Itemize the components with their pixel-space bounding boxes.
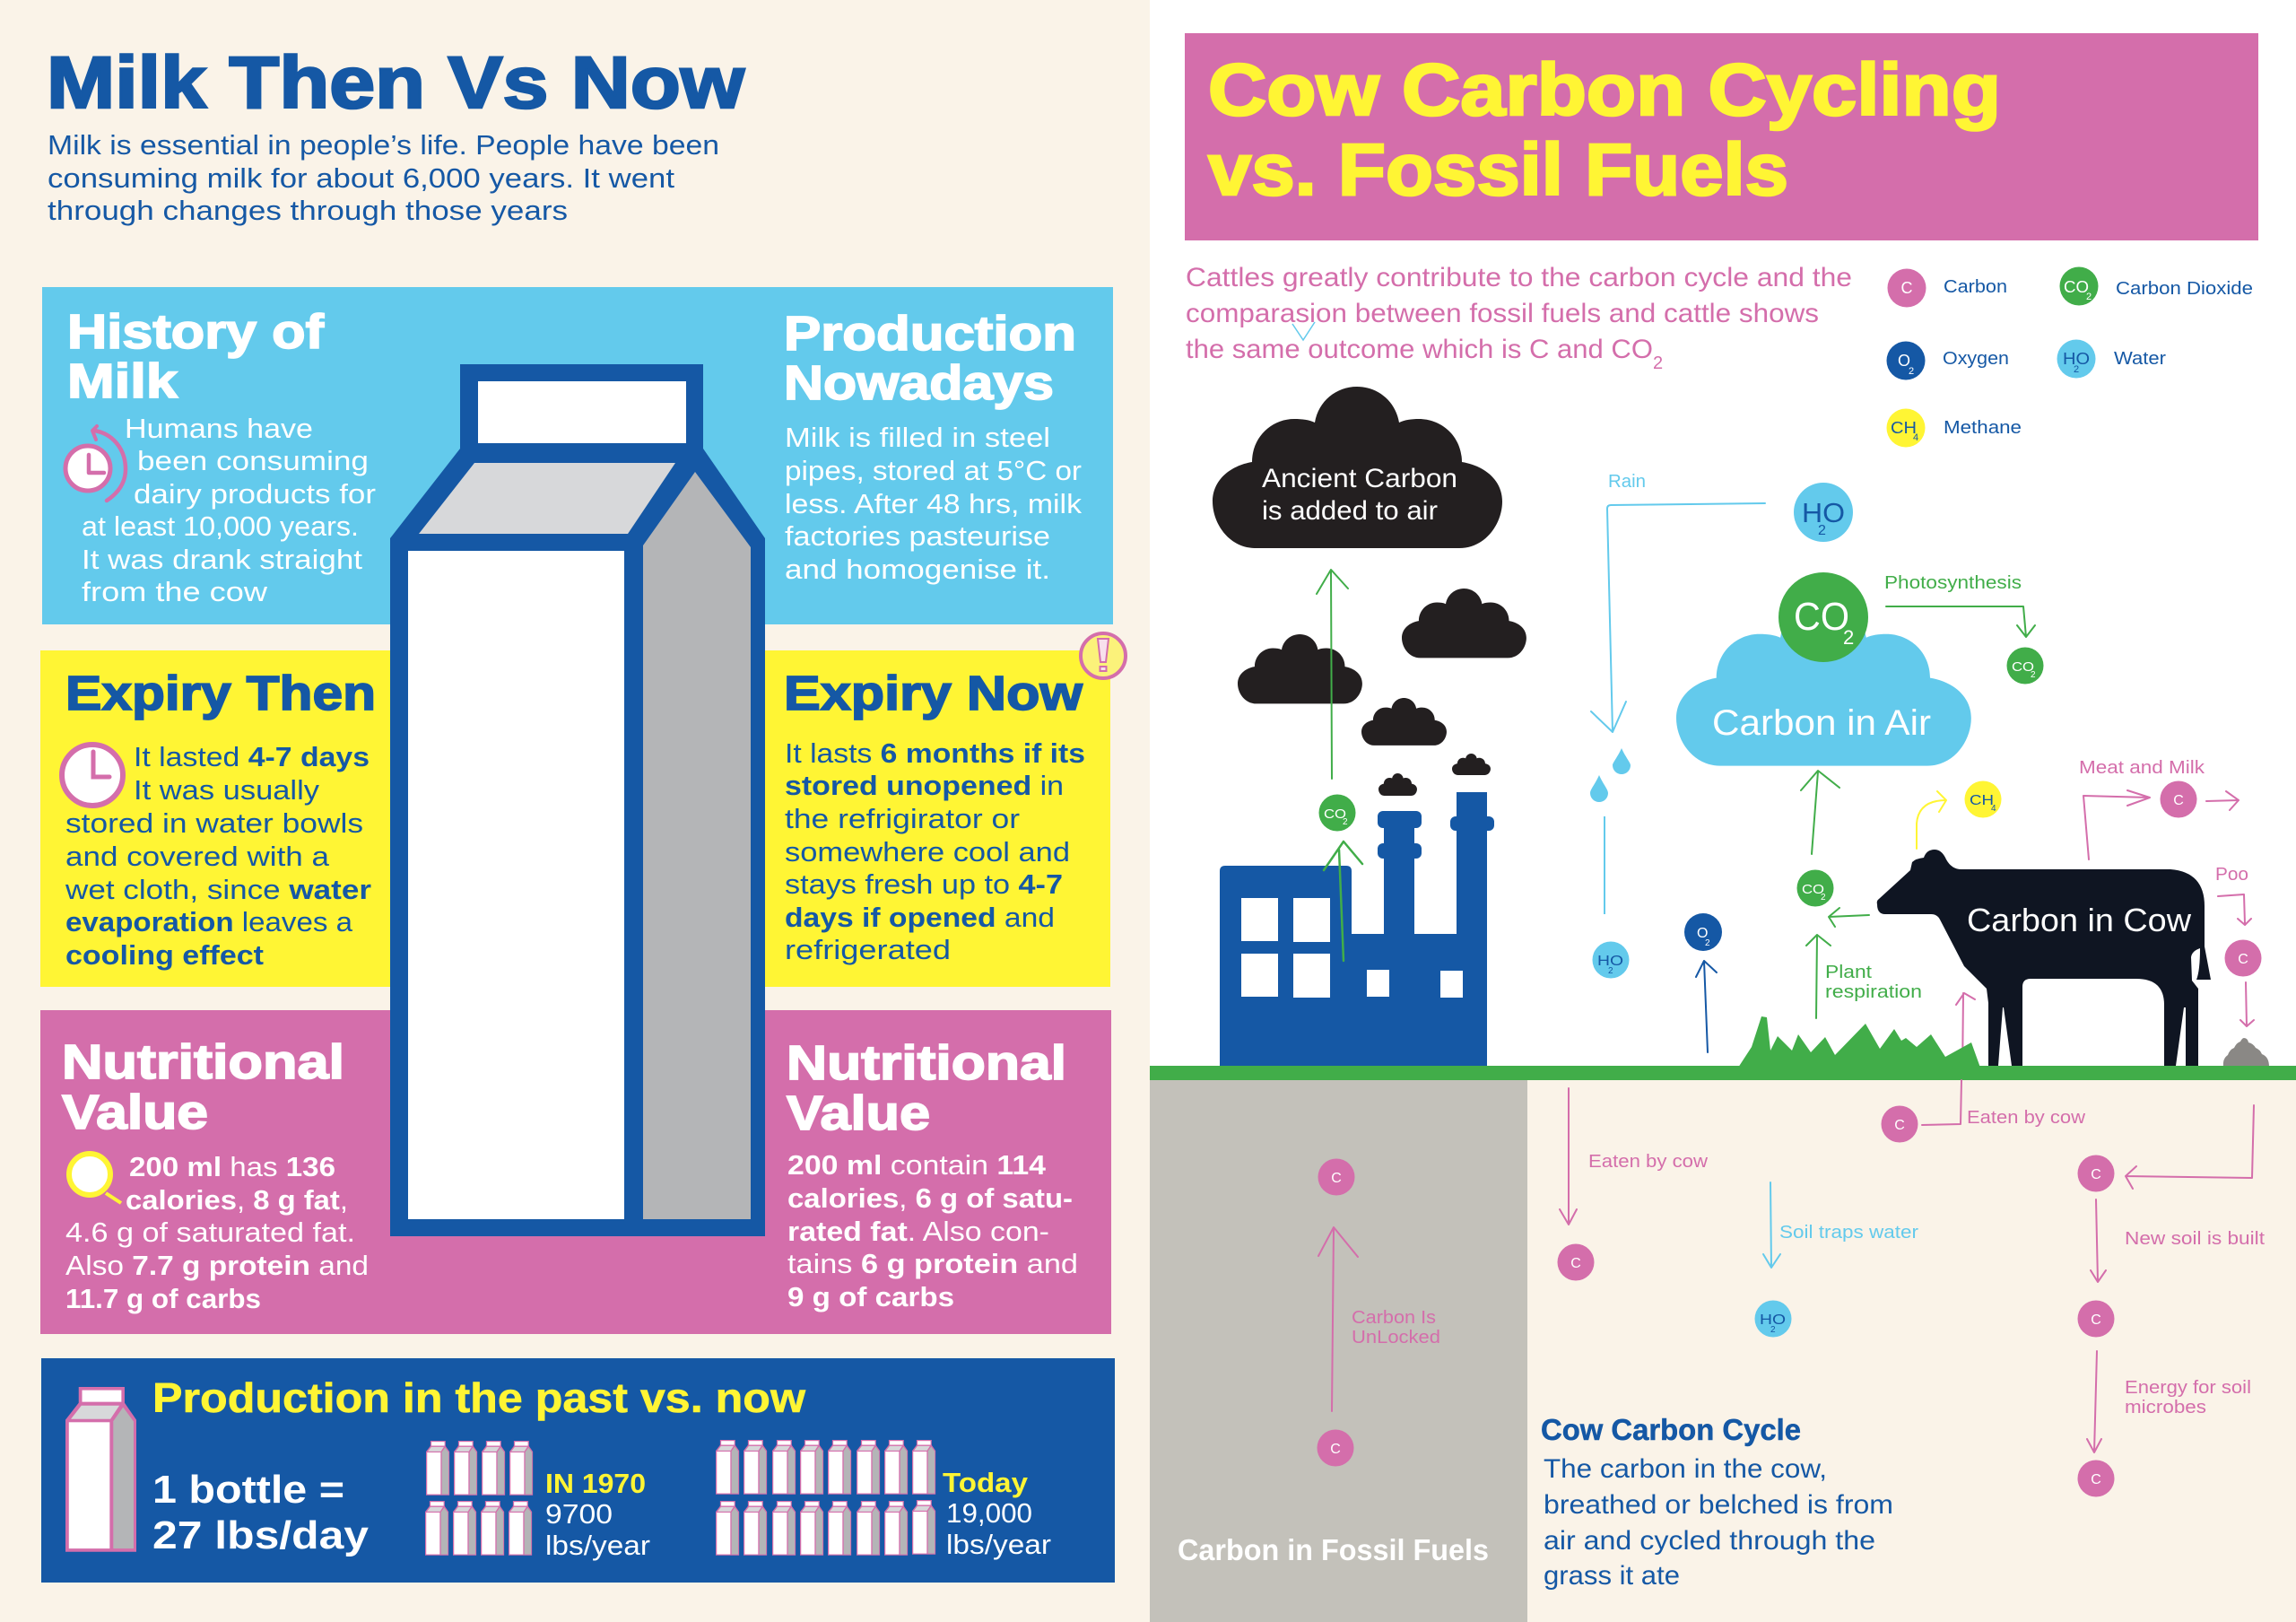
legend item: water: Water <box>2114 349 2166 369</box>
soil cycle: new soil is built <box>2091 1199 2265 1282</box>
stat: 1970: lbs/year <box>545 1530 650 1561</box>
poo: label and arrows: Poo <box>2215 865 2248 885</box>
panel: right title banner <box>1185 33 2258 240</box>
fossil panel: carbon unlocked <box>1178 1159 1489 1566</box>
stat: 1970: 9700 <box>545 1498 613 1530</box>
text: production nowadays: factories pasteurise <box>785 520 1050 552</box>
cloud: ancient carbon: is added to air <box>1262 496 1438 526</box>
arrow: oxygen rising <box>1696 961 1717 1052</box>
soil cycle: eaten by cow left: Eaten by cow <box>1588 1152 1709 1172</box>
soil cycle: soil traps water: Soil traps water <box>1779 1223 1918 1243</box>
legend item: oxygen: 2 <box>1909 366 1914 377</box>
molecule: water in soil: 2 <box>1770 1325 1776 1335</box>
text: expiry then: It was usually <box>134 774 320 806</box>
molecule: carbon in soil left <box>1557 1243 1595 1281</box>
molecule: oxygen <box>1684 913 1722 951</box>
arrow: CO2 rising to air <box>1801 771 1839 854</box>
title: Cow Carbon Cycling vs. Fossil Fuels: vs. Fossil Fuels <box>1208 129 1788 211</box>
text: history of milk: dairy products for <box>134 478 376 510</box>
text: nutrition then: 200 ml has 136 <box>129 1151 335 1182</box>
molecule: carbon in poo <box>2224 940 2262 976</box>
arrow: poo into soil <box>2126 1105 2254 1189</box>
soil cycle: eaten by cow right: C <box>1894 1118 1905 1133</box>
molecule: water in sky <box>1794 483 1853 542</box>
legend item: carbon: C <box>1901 279 1912 297</box>
molecule: carbon top <box>1318 1159 1354 1195</box>
text: production nowadays: and homogenise it. <box>785 554 1050 585</box>
text: expiry now <box>785 737 1085 965</box>
soil cycle: energy for soil microbes: microbes <box>2125 1398 2206 1417</box>
text: expiry now: It lasts 6 months if its <box>785 737 1085 769</box>
panel: production in the past vs now <box>41 1358 1115 1583</box>
legend item: carbon dioxide: CO <box>2064 278 2089 296</box>
text: expiry then: wet cloth, since water <box>65 874 371 905</box>
text: production nowadays: pipes, stored at 5°C or <box>785 455 1082 486</box>
text block: cow carbon cycle: grass it ate <box>1544 1561 1680 1591</box>
photosynthesis: label and arrow: Photosynthesis <box>1884 573 2022 593</box>
soil cycle: energy for soil microbes <box>2087 1351 2251 1452</box>
legend item: carbon dioxide <box>2059 267 2253 305</box>
pictogram: 1970 cartons <box>425 1441 533 1556</box>
stat: today: 19,000 <box>946 1497 1032 1529</box>
molecule: CO2 after photosynthesis: CO <box>2012 659 2034 675</box>
plant respiration: label and arrow: respiration <box>1825 982 1922 1002</box>
stat: 1970 <box>545 1468 650 1561</box>
icon: magnifier <box>69 1154 121 1203</box>
meat and milk: label and arrows <box>2079 758 2239 859</box>
text: expiry then: evaporation leaves a <box>65 906 353 937</box>
molecule: carbon bottom <box>1317 1430 1354 1466</box>
illustration: cow <box>1877 850 2211 1066</box>
heading: production in the past vs now: Production in the past vs. now <box>152 1374 805 1421</box>
rain: label and arrow: Rain <box>1608 472 1646 492</box>
stat: today <box>943 1467 1051 1560</box>
label: carbon is unlocked: Carbon Is <box>1352 1308 1436 1328</box>
intro text: cattle and the carbon cycle <box>1186 263 1852 373</box>
legend item: methane: CH <box>1891 419 1917 437</box>
text: expiry now: the refrigirator or <box>785 803 1020 834</box>
heading: nutritional value then: Nutritional <box>62 1035 344 1089</box>
illustration: large milk carton <box>390 364 765 1236</box>
text: nutrition now <box>787 1149 1078 1312</box>
molecule: methane: CH <box>1970 793 1994 808</box>
text: nutrition then: 4.6 g of saturated fat. <box>65 1216 355 1248</box>
text: production nowadays <box>785 422 1083 585</box>
text: expiry then: stored in water bowls <box>65 807 363 839</box>
text: nutrition then <box>65 1151 369 1314</box>
right page upper background <box>1150 0 2296 1068</box>
title: Cow Carbon Cycling vs. Fossil Fuels <box>1208 49 2001 211</box>
molecule: carbon soil middle <box>2077 1301 2115 1337</box>
legend item: oxygen: O <box>1898 352 1910 370</box>
molecule: carbon new soil: C <box>2091 1167 2101 1182</box>
pictogram: today cartons <box>716 1440 935 1556</box>
molecule: carbon in meat and milk: C <box>2173 793 2184 808</box>
molecule: water in sky: 2 <box>1818 523 1826 538</box>
meat and milk: label and arrows: Meat and Milk <box>2079 758 2205 778</box>
legend item: methane: Methane <box>1944 418 2022 438</box>
text block: cow carbon cycle: Cow Carbon Cycle <box>1541 1413 1801 1446</box>
molecule: water in soil <box>1754 1301 1792 1337</box>
intro text: cattle and the carbon cycle: the same outcome which is C and CO <box>1186 335 1653 364</box>
heading: nutritional value then: Value <box>62 1086 208 1139</box>
grass <box>1738 1016 1980 1068</box>
text: nutrition then: calories, 8 g fat, <box>126 1184 348 1216</box>
soil cycle: energy for soil microbes: Energy for soil <box>2125 1378 2251 1398</box>
molecule: carbon soil bottom <box>2077 1461 2115 1496</box>
icon: clock with rotating arrow <box>65 426 126 501</box>
molecule: water at ground: HO <box>1597 954 1623 969</box>
stat: one bottle <box>152 1468 370 1557</box>
heading: History of Milk <box>67 305 325 408</box>
text block: cow carbon cycle: The carbon in the cow, <box>1544 1454 1827 1484</box>
arrow: factory emission <box>1324 842 1362 961</box>
arrow: cow breath <box>1829 908 1869 927</box>
illustration: cow: Carbon in Cow <box>1967 902 2192 938</box>
text: expiry now: days if opened and <box>785 902 1055 933</box>
panel: yellow expiry then <box>40 650 399 987</box>
heading: Production Nowadays: Nowadays <box>784 356 1054 410</box>
molecule: large CO2: 2 <box>1843 626 1854 649</box>
heading: nutritional value now <box>787 1036 1066 1140</box>
soil cycle: soil traps water <box>1763 1182 1918 1268</box>
text: expiry then <box>65 741 371 971</box>
text: history of milk: been consuming <box>137 445 369 476</box>
arrow: carbon unlocked <box>1318 1227 1358 1411</box>
text: history of milk: It was drank straight <box>82 544 362 575</box>
intro text: Milk is essential in people’s life. People have been <box>48 129 719 161</box>
text: expiry then: cooling effect <box>65 939 264 971</box>
legend item: carbon dioxide: 2 <box>2086 292 2092 302</box>
text: nutrition now: 9 g of carbs <box>787 1281 954 1312</box>
arrow: carbon eaten by cow upward <box>1956 993 1975 1077</box>
molecule: water at ground <box>1593 942 1629 978</box>
text: nutrition now: calories, 6 g of satu- <box>787 1182 1073 1214</box>
legend item: water: 2 <box>2074 364 2079 375</box>
legend item: oxygen: Oxygen <box>1943 349 2009 369</box>
text: expiry then: It lasted 4-7 days <box>134 741 370 772</box>
arrow: methane from cow <box>1917 791 1946 849</box>
heading: nutritional value now: Nutritional <box>787 1036 1066 1090</box>
text: nutrition now: 200 ml contain 114 <box>787 1149 1047 1181</box>
intro text: cattle and the carbon cycle: Cattles greatly contribute to the carbon cycle and the <box>1186 263 1852 292</box>
cloud: carbon in air <box>1676 601 1971 766</box>
label: carbon is unlocked <box>1352 1308 1440 1347</box>
icon: water drops <box>1590 748 1631 802</box>
heading: Production Nowadays <box>784 307 1076 410</box>
panel: pink nutritional value <box>40 1010 1111 1334</box>
text: history of milk: at least 10,000 years. <box>82 510 359 542</box>
legend item: oxygen <box>1887 341 2009 380</box>
soil cycle: eaten by cow right <box>1882 1080 2086 1143</box>
molecule: CO2 above factory: CO <box>1324 807 1346 822</box>
molecule: CO2 from cow <box>1797 870 1833 906</box>
legend item: water: HO <box>2063 350 2090 368</box>
icon: clock <box>62 745 123 806</box>
molecule: carbon bottom: C <box>1330 1442 1341 1457</box>
molecule: carbon top: C <box>1331 1171 1342 1186</box>
text block: cow carbon cycle <box>1541 1413 1893 1591</box>
heading: Expiry Then: Expiry Then <box>65 667 376 720</box>
plant respiration: label and arrow: Plant <box>1825 963 1872 982</box>
text: history of milk <box>82 413 376 607</box>
poo: label and arrows <box>2215 865 2254 1026</box>
clouds: smoke <box>1238 589 1526 796</box>
arrow: smoke carbon rising to ancient carbon cloud <box>1317 570 1348 779</box>
icon: carton <box>65 1387 136 1552</box>
panel: yellow expiry now <box>758 633 1126 987</box>
cloud: ancient carbon <box>1213 387 1502 548</box>
intro text: through changes through those years <box>48 195 568 226</box>
molecule: carbon new soil <box>2077 1155 2115 1191</box>
ground strip <box>1150 1066 2296 1080</box>
line: water down to soil <box>1604 816 1605 914</box>
stat: one bottle: 1 bottle = <box>152 1468 344 1512</box>
text: expiry now: stored unopened in <box>785 770 1064 801</box>
intro text: cattle and the carbon cycle: 2 <box>1653 353 1663 373</box>
soil cycle: new soil is built: New soil is built <box>2125 1229 2265 1249</box>
cloud: carbon in air: Carbon in Air <box>1712 703 1931 743</box>
text: history of milk: Humans have <box>125 413 313 444</box>
heading: Expiry Now: Expiry Now <box>784 667 1083 720</box>
legend item: methane <box>1887 409 2022 447</box>
soil cycle: eaten by cow left <box>1560 1088 1709 1225</box>
plant respiration: label and arrow <box>1806 935 1922 1018</box>
text: nutrition then: 11.7 g of carbs <box>65 1283 261 1314</box>
molecule: CO2 from cow: 2 <box>1821 893 1826 903</box>
stat: today: lbs/year <box>946 1529 1051 1560</box>
molecule: oxygen: O <box>1697 926 1708 941</box>
text: expiry then: and covered with a <box>65 841 330 872</box>
molecule: carbon in poo: C <box>2238 952 2248 967</box>
heading: History of Milk: Milk <box>67 354 178 408</box>
icon: poo pile <box>2223 1038 2269 1067</box>
molecule: oxygen: 2 <box>1705 938 1710 948</box>
molecule: CO2 from cow: CO <box>1802 882 1824 897</box>
text: production nowadays: Milk is filled in steel <box>785 422 1050 453</box>
text block: cow carbon cycle: air and cycled through the <box>1544 1526 1875 1556</box>
intro text: cattle and the carbon cycle: comparasion between fossil fuels and cattle shows <box>1186 299 1819 328</box>
legend item: water <box>2057 339 2166 379</box>
text: nutrition now: tains 6 g protein and <box>787 1248 1078 1279</box>
heading: Production Nowadays: Production <box>784 307 1076 361</box>
molecule: carbon in meat and milk <box>2160 780 2197 818</box>
heading: nutritional value now: Value <box>787 1086 930 1140</box>
label: carbon in fossil fuels: Carbon in Fossil Fuels <box>1178 1533 1489 1566</box>
legend <box>1887 267 2253 447</box>
molecule: carbon in soil left: C <box>1570 1256 1581 1271</box>
heading: nutritional value then <box>62 1035 344 1139</box>
stat: today: Today <box>943 1467 1029 1498</box>
legend item: carbon <box>1887 269 2007 307</box>
legend item: carbon dioxide: Carbon Dioxide <box>2116 279 2253 299</box>
molecule: CO2 above factory <box>1318 795 1356 831</box>
molecule: CO2 above factory: 2 <box>1343 817 1348 827</box>
icon: exclamation warning <box>1081 633 1126 678</box>
molecule: water at ground: 2 <box>1608 966 1613 976</box>
text: expiry now: stays fresh up to 4-7 <box>785 868 1063 900</box>
intro text: consuming milk for about 6,000 years. It went <box>48 162 674 194</box>
intro text <box>48 129 719 226</box>
molecule: carbon soil bottom: C <box>2091 1472 2101 1487</box>
stat: 1970: IN 1970 <box>545 1468 646 1499</box>
text: expiry now: refrigerated <box>785 934 951 965</box>
text: history of milk: from the cow <box>82 576 268 607</box>
text block: cow carbon cycle: breathed or belched is from <box>1544 1490 1893 1520</box>
text: nutrition now: rated fat . Also con- <box>787 1216 1049 1247</box>
text: expiry now: somewhere cool and <box>785 836 1070 868</box>
stat: one bottle: 27 lbs/day <box>152 1513 370 1557</box>
cloud: ancient carbon: Ancient Carbon <box>1262 464 1457 493</box>
molecule: water in soil: HO <box>1760 1312 1786 1328</box>
text: production nowadays: less. After 48 hrs, milk <box>785 488 1083 519</box>
illustration: factory <box>1220 792 1494 1068</box>
legend item: carbon: Carbon <box>1944 277 2007 297</box>
ground and soil layers <box>1150 1080 2296 1622</box>
photosynthesis: label and arrow <box>1884 573 2035 637</box>
molecule: methane: 4 <box>1991 804 1996 814</box>
panel: light blue history and production <box>42 287 1113 624</box>
molecule: water in sky: HO <box>1802 497 1845 528</box>
heading: History of Milk: History of <box>67 305 325 359</box>
text: nutrition then: Also 7.7 g protein and <box>65 1250 369 1281</box>
legend item: methane: 4 <box>1913 432 1918 443</box>
title: Cow Carbon Cycling vs. Fossil Fuels: Cow Carbon Cycling <box>1208 49 2001 131</box>
title: Milk Then Vs Now: Milk Then Vs Now <box>47 42 744 124</box>
soil cycle: eaten by cow right: Eaten by cow <box>1967 1108 2086 1128</box>
molecule: large CO2 <box>1779 572 1868 662</box>
left page background <box>0 0 1150 1622</box>
molecule: CO2 after photosynthesis <box>2007 648 2043 684</box>
molecule: methane <box>1964 780 2002 818</box>
label: carbon is unlocked: UnLocked <box>1352 1328 1440 1347</box>
molecule: large CO2: CO <box>1794 595 1849 639</box>
molecule: carbon soil middle: C <box>2091 1312 2101 1328</box>
molecule: CO2 after photosynthesis: 2 <box>2031 670 2036 680</box>
rain: label and arrow <box>1591 472 1765 732</box>
